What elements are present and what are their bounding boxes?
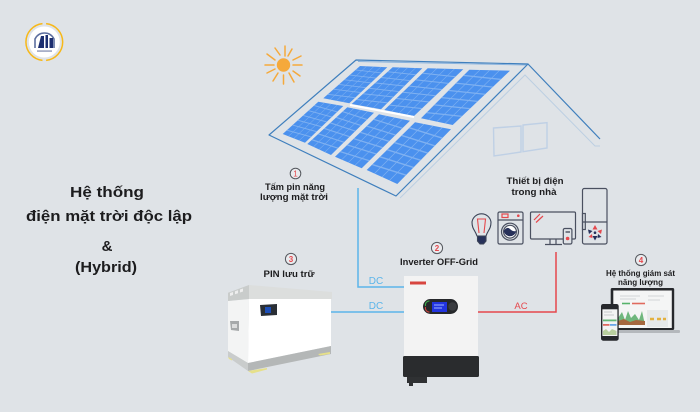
- label 1: solar panels: Tấm pin năng: [265, 182, 325, 192]
- label 4: monitoring: Hệ thống giám sát: [606, 269, 675, 278]
- label 4: monitoring: 4: [639, 256, 644, 265]
- phone: [601, 304, 619, 341]
- battery unit: [228, 285, 332, 374]
- title: &: [102, 238, 113, 255]
- inverter brand mark: [410, 282, 426, 284]
- label 1: solar panels: 1: [293, 170, 298, 178]
- window: [494, 123, 547, 156]
- connector: battery to inverter DC: DC: [369, 301, 383, 312]
- icon: remote control: [563, 228, 572, 244]
- label 2: inverter: [400, 242, 478, 267]
- connector: inverter to appliances AC: AC: [514, 301, 528, 312]
- solar roof: [269, 57, 528, 196]
- icon: light bulb: [472, 214, 491, 244]
- connector: inverter to appliances AC: [478, 252, 556, 312]
- label: home appliances: [506, 176, 564, 197]
- title: Hệ thống: [70, 184, 144, 201]
- title: [26, 184, 192, 276]
- laptop: [610, 288, 680, 333]
- label: home appliances: trong nhà: [512, 187, 557, 197]
- title: (Hybrid): [75, 259, 137, 276]
- label 2: inverter: Inverter OFF-Grid: [400, 257, 478, 267]
- connector: battery to inverter DC: [331, 301, 404, 312]
- icon: refrigerator: [582, 188, 607, 244]
- label 3: battery: [264, 253, 315, 279]
- battery display: [260, 304, 277, 316]
- connector: panel to inverter DC: DC: [369, 276, 383, 287]
- logo: [26, 24, 63, 60]
- inverter display panel: [423, 299, 458, 314]
- inverter unit: [403, 276, 479, 386]
- title: điện mặt trời độc lập: [26, 208, 192, 225]
- label: home appliances: Thiết bị điện: [506, 176, 564, 186]
- laptop and phone monitoring dashboard: [601, 288, 680, 341]
- fan: [588, 225, 602, 240]
- label 1: solar panels: [260, 168, 328, 202]
- solar panels: [282, 66, 510, 184]
- label 3: battery: 3: [289, 255, 294, 264]
- label 1: solar panels: lượng mặt trời: [260, 192, 328, 202]
- icon: sun: [265, 46, 302, 84]
- label 4: monitoring: năng lượng: [618, 278, 663, 287]
- connector: panel to inverter DC: [358, 188, 404, 287]
- house outline: [400, 64, 600, 198]
- icon: washing machine: [498, 212, 523, 244]
- label 3: battery: PIN lưu trữ: [264, 269, 315, 279]
- label 2: inverter: 2: [435, 244, 440, 253]
- label 4: monitoring: [606, 254, 675, 287]
- icon: television with remote: [530, 212, 576, 244]
